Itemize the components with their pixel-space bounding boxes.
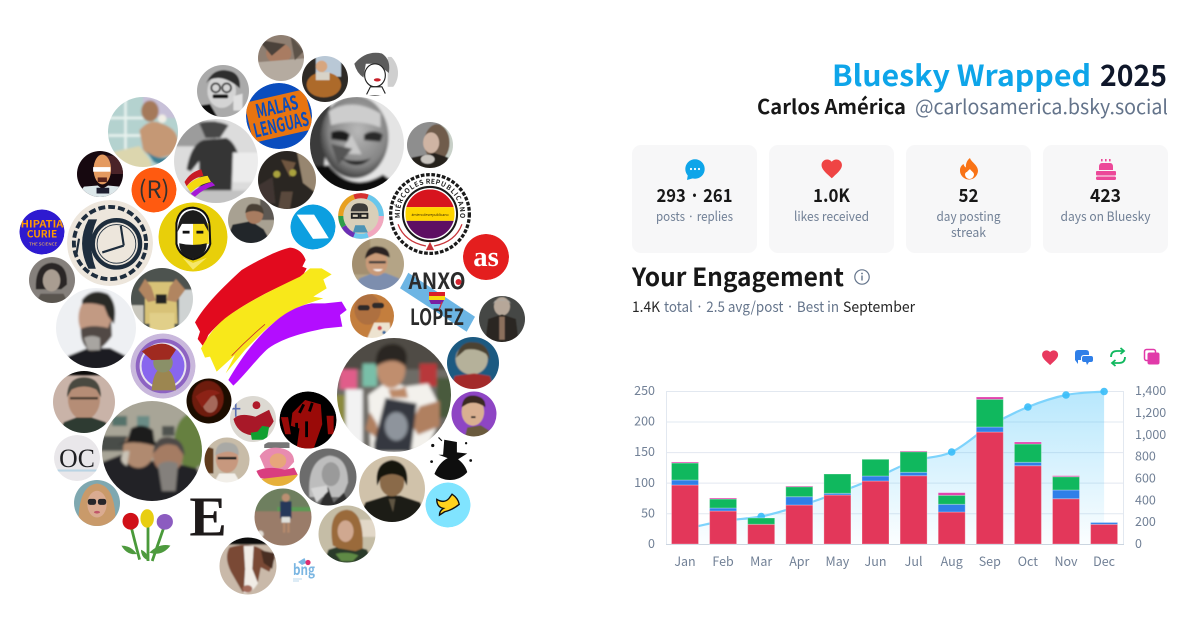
heading: Bluesky Wrapped 2025: Bluesky Wrapped bbox=[832, 53, 1091, 95]
avatar: E logo bbox=[176, 484, 240, 549]
avatar: blonde woman sketch bbox=[300, 448, 356, 506]
panel: streak card bbox=[906, 145, 1031, 253]
avatar: E logo: E bbox=[189, 487, 227, 549]
avatar: rainbow ring illustration bbox=[338, 193, 384, 239]
avatar: pink cartoon character bbox=[256, 442, 298, 486]
chart: month labels: Sep bbox=[979, 551, 1001, 570]
avatar: Malas Lenguas logo bbox=[243, 83, 314, 149]
panel: likes card: 1.0K bbox=[813, 182, 851, 208]
avatar: moustached man bbox=[197, 65, 249, 117]
avatar: man in bookstore with book bbox=[337, 338, 451, 452]
avatar: blue app logo bbox=[290, 204, 336, 250]
chart: month labels: Jan bbox=[674, 551, 696, 570]
avatar: woman with sunglasses bbox=[350, 294, 394, 338]
chart: month labels: Aug bbox=[941, 551, 963, 570]
avatar: cartoon woman bbox=[352, 50, 398, 96]
avatar: orange (R) logo: (R) bbox=[139, 171, 169, 205]
avatar: older man portrait bbox=[310, 97, 404, 191]
chart: month labels: Dec bbox=[1093, 551, 1116, 570]
text: engagement summary: total · 2.5 avg/post · Best in bbox=[664, 296, 839, 317]
avatar: gray-haired man with glasses bbox=[204, 438, 250, 482]
avatar: yellow shoe on light blue bbox=[426, 482, 470, 528]
panel: likes card bbox=[769, 145, 894, 253]
avatar: Anxo Lopez banner: LOPEZ bbox=[410, 300, 464, 332]
chart: right axis labels: 600 bbox=[1135, 468, 1156, 486]
avatar: Anxo Lopez banner bbox=[400, 264, 475, 332]
avatar: person with dog bbox=[302, 56, 348, 102]
avatar: BNG logo: bng bbox=[293, 559, 315, 580]
text: engagement summary bbox=[632, 296, 915, 317]
chart: left axis labels: 0 bbox=[648, 533, 655, 552]
icon: flame bbox=[960, 158, 978, 180]
chart: right axis labels: 1,200 bbox=[1135, 402, 1166, 421]
avatar: smiling woman bbox=[352, 238, 404, 290]
panel: likes card: likes received bbox=[794, 206, 869, 225]
text: engagement summary: September bbox=[843, 296, 915, 317]
chart: monthly engagement stacked bars with cumulative line bbox=[634, 380, 1166, 570]
panel: posts and replies card: 293 · 261 bbox=[656, 182, 732, 208]
icon: cake bbox=[1096, 159, 1116, 180]
icon: heart bbox=[822, 160, 842, 178]
chart: left axis labels: 200 bbox=[634, 410, 655, 430]
legend: engagement types bbox=[1042, 348, 1160, 366]
avatar: Miercoles Republicano badge bbox=[389, 173, 471, 255]
chart: stacked bars bbox=[672, 397, 1118, 544]
panel: avatar cloud bbox=[20, 35, 525, 594]
panel: streak card: streak bbox=[951, 222, 987, 241]
heading: Bluesky Wrapped 2025: 2025 bbox=[1100, 53, 1167, 95]
avatar: OC logo: OC bbox=[59, 443, 95, 473]
avatar: man walking on a path bbox=[249, 483, 317, 551]
icon: likes legend bbox=[1042, 350, 1058, 365]
avatar: Anxo Lopez banner: ANXO bbox=[408, 264, 466, 296]
avatar: man on purple background bbox=[452, 392, 496, 436]
icon: chat bubble bbox=[685, 159, 705, 180]
text: display name and handle: Carlos América bbox=[757, 91, 906, 120]
avatar: retro TV man bbox=[77, 151, 123, 197]
avatar: man with glasses reading bbox=[228, 197, 274, 243]
avatar: man from behind with flag bbox=[174, 119, 258, 203]
icon: quotes legend bbox=[1144, 350, 1160, 364]
chart: month labels bbox=[674, 551, 1116, 570]
chart: right axis labels: 400 bbox=[1135, 490, 1156, 508]
avatar: orange (R) logo bbox=[132, 168, 176, 212]
icon: replies legend bbox=[1075, 350, 1093, 365]
avatar: woman in profile bbox=[407, 122, 453, 168]
avatar: bearded man in profile bbox=[56, 288, 136, 368]
chart: right axis labels: 800 bbox=[1135, 446, 1156, 464]
avatar: AS logo: as bbox=[473, 241, 499, 273]
avatar: Yoda badge bbox=[130, 334, 196, 398]
avatar: two men selfie bbox=[102, 401, 202, 501]
heading: Your Engagement: Your Engagement bbox=[631, 258, 844, 294]
panel: days on Bluesky card: days on Bluesky bbox=[1060, 206, 1151, 225]
avatar: tortoiseshell cat bbox=[258, 151, 316, 209]
chart: cumulative area and line bbox=[685, 388, 1108, 544]
panel: posts and replies card: posts · replies bbox=[656, 206, 733, 225]
text: display name and handle: @carlosamerica.bsky.social bbox=[915, 91, 1168, 120]
chart: left axis labels bbox=[634, 380, 655, 552]
avatar: shirtless man on telephone bbox=[108, 97, 178, 167]
panel: posts and replies card bbox=[632, 145, 757, 253]
avatar: painted child bbox=[447, 337, 499, 389]
avatar: red-haired woman bbox=[186, 378, 232, 424]
avatar: brown and white dog bbox=[214, 532, 282, 600]
chart: right axis labels: 1,000 bbox=[1135, 424, 1166, 443]
icon: reposts legend bbox=[1111, 348, 1125, 366]
chart: left axis labels: 100 bbox=[634, 472, 655, 491]
panel: streak card: day posting bbox=[936, 206, 1001, 225]
avatar: yellow bearded illustration bbox=[158, 202, 228, 272]
avatar: three roses bbox=[121, 509, 173, 561]
text: display name and handle bbox=[757, 91, 1168, 120]
chart: right axis labels: 0 bbox=[1135, 533, 1142, 552]
avatar: Hipatia Curie logo bbox=[20, 210, 64, 254]
avatar: archival woman portrait bbox=[29, 257, 75, 303]
text: engagement summary: 1.4K bbox=[632, 296, 661, 317]
chart: month labels: Apr bbox=[789, 551, 810, 570]
chart: right axis labels bbox=[1135, 380, 1166, 552]
chart: left axis labels: 50 bbox=[641, 502, 655, 522]
avatar: long-haired rocker bbox=[313, 500, 381, 568]
avatar: man with glasses and mustache bbox=[53, 371, 115, 433]
chart: month labels: Jun bbox=[865, 551, 886, 570]
panel: streak card: 52 bbox=[958, 182, 978, 208]
avatar: squirrel bbox=[258, 35, 304, 81]
avatar: cartoon woman with sunglasses bbox=[74, 480, 120, 526]
avatar: OC logo bbox=[54, 435, 100, 481]
chart: right axis labels: 200 bbox=[1135, 511, 1156, 530]
avatar: AS logo bbox=[463, 234, 509, 280]
chart: month labels: Nov bbox=[1054, 551, 1078, 570]
chart: left axis labels: 150 bbox=[634, 441, 655, 460]
panel: days on Bluesky card bbox=[1043, 145, 1168, 253]
chart: left axis labels: 250 bbox=[634, 380, 655, 399]
icon: info bbox=[855, 270, 869, 284]
chart: month labels: May bbox=[826, 551, 850, 570]
avatar: clock logo bbox=[67, 200, 153, 286]
chart: month labels: Mar bbox=[750, 551, 772, 570]
avatar: spy silhouette bbox=[427, 434, 473, 480]
chart: month labels: Jul bbox=[905, 551, 923, 570]
panel: days on Bluesky card: 423 bbox=[1090, 182, 1121, 208]
avatar: elderly man in dark jacket bbox=[479, 296, 525, 342]
chart: right axis labels: 1,400 bbox=[1135, 380, 1166, 399]
flag: Spanish republic brush strokes bbox=[195, 248, 347, 386]
avatar: red figure painting bbox=[230, 396, 276, 442]
avatar: red fist bbox=[280, 392, 336, 448]
avatar: man in yellow tank top bbox=[131, 268, 193, 330]
avatar: curly-haired man bbox=[352, 449, 432, 529]
chart: month labels: Oct bbox=[1018, 551, 1038, 570]
chart: month labels: Feb bbox=[712, 551, 734, 570]
